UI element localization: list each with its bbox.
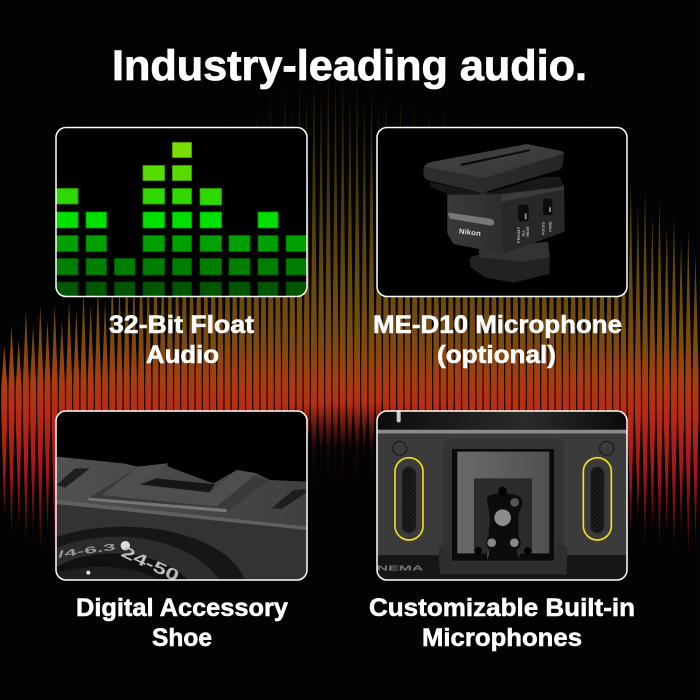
- nikon logo: Nikon: [458, 226, 482, 238]
- panel: 32-bit float audio: [56, 128, 307, 298]
- caption: customizable built-in microphones: [369, 594, 635, 652]
- icon: microphone product: PURE: [549, 221, 553, 232]
- icon: microphone product: [423, 144, 565, 283]
- caption: ME-D10 microphone: [373, 311, 622, 369]
- lens markings: 24-50: [118, 544, 182, 585]
- caption: 32-bit float audio: Audio: [146, 341, 219, 369]
- microphone grille right: [590, 467, 604, 533]
- icon: microphone product: FOCUS: [542, 222, 546, 235]
- microphone grille left: [402, 467, 416, 533]
- camera body with hot shoe: /4-6.3: [57, 542, 116, 560]
- caption: 32-bit float audio: 32-Bit Float: [109, 311, 255, 339]
- caption: digital accessory shoe: Digital Accessory: [76, 594, 288, 622]
- highlight ring left: [395, 458, 423, 540]
- caption: digital accessory shoe: Shoe: [152, 624, 212, 652]
- caption: customizable built-in microphones: Customizable Built-in: [369, 594, 635, 622]
- icon: microphone product: REAR: [526, 226, 530, 237]
- camera body with hot shoe: [56, 456, 306, 580]
- caption: ME-D10 microphone: ME-D10 Microphone: [373, 311, 622, 339]
- caption: customizable built-in microphones: Microphones: [422, 624, 582, 652]
- chart: green audio level meter: [56, 142, 307, 298]
- panel: ME-D10 microphone: [377, 128, 627, 296]
- caption: ME-D10 microphone: (optional): [437, 341, 556, 369]
- caption: digital accessory shoe: [76, 594, 288, 652]
- panel: digital accessory shoe: [55, 410, 308, 581]
- icon: microphone product: ALL: [522, 229, 526, 237]
- highlight ring right: [583, 458, 611, 540]
- panel: customizable built-in microphones: [377, 411, 627, 580]
- caption: 32-bit float audio: [109, 311, 255, 369]
- camera top with microphones: [377, 411, 627, 580]
- title: Industry-leading audio.: [112, 42, 587, 90]
- icon: microphone product: FRONT: [517, 226, 521, 243]
- camera top with microphones: NEMA: [377, 564, 424, 573]
